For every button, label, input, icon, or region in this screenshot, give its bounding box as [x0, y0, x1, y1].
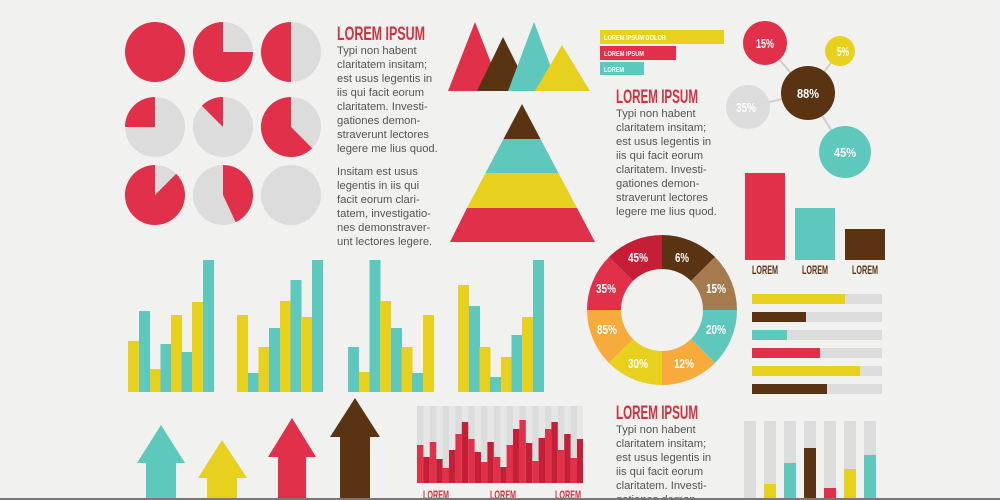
text block 1: legere me lius quod.: [337, 143, 438, 155]
text block 1: Insitam est usus: [337, 166, 418, 178]
text block 3: claritatem. Investi-: [616, 480, 707, 492]
bubble network: 35%: [736, 100, 756, 115]
tag bars legend: [600, 30, 724, 75]
pie chart grid: [125, 22, 321, 225]
text block 3: [616, 403, 711, 500]
donut chart: 35%: [596, 281, 616, 296]
text block 2: [616, 87, 717, 218]
bubble network: 15%: [756, 36, 774, 51]
text block 2: iis qui facit eorum: [616, 150, 703, 162]
text block 1: Typi non habent: [337, 45, 418, 57]
text block 2: legere me lius quod.: [616, 206, 717, 218]
text block 2: Typi non habent: [616, 108, 697, 120]
text block 1: tatem, investigatio-: [337, 208, 431, 220]
text block 1: legentis in iis qui: [337, 180, 419, 192]
text block 3: LOREM IPSUM: [616, 403, 698, 424]
donut chart: 15%: [706, 281, 726, 296]
arrow: brown: [330, 398, 380, 500]
donut chart: 6%: [675, 250, 689, 265]
text block 3: Typi non habent: [616, 424, 697, 436]
text block 2: LOREM IPSUM: [616, 87, 698, 108]
bubble network: 88%: [797, 86, 819, 101]
text block 3: est usus legentis in: [616, 452, 711, 464]
text block 3: iis qui facit eorum: [616, 466, 703, 478]
text block 1: claritatem insitam;: [337, 59, 427, 71]
bar chart group 4: [458, 260, 544, 392]
text block 2: straverunt lectores: [616, 192, 708, 204]
text block 1: nes demonstraver-: [337, 222, 431, 234]
donut chart: 20%: [706, 322, 726, 337]
column chart with labels: LOREM: [852, 263, 878, 277]
donut chart: 85%: [597, 322, 617, 337]
bar chart group 1: [128, 260, 214, 392]
text block 1: est usus legentis in: [337, 73, 432, 85]
horizontal progress bars: [752, 294, 882, 394]
tag bars legend: LOREM IPSUM DOLOR: [604, 35, 666, 42]
text block 1: facit eorum clari-: [337, 194, 420, 206]
layered pyramid: [450, 104, 595, 242]
text block 3: claritatem insitam;: [616, 438, 706, 450]
donut chart: [587, 235, 737, 385]
text block 1: [337, 24, 438, 248]
donut chart: 30%: [628, 356, 648, 371]
bar chart group 2: [237, 260, 323, 392]
bar chart group 3: [348, 260, 434, 392]
bubble network: 45%: [834, 145, 856, 160]
text block 1: LOREM IPSUM: [337, 24, 425, 45]
column chart with labels: LOREM: [802, 263, 828, 277]
column chart with labels: [745, 173, 885, 277]
text block 1: claritatem. Investi-: [337, 101, 428, 113]
tag bars legend: LOREM IPSUM: [604, 51, 644, 58]
text block 2: est usus legentis in: [616, 136, 711, 148]
text block 1: gationes demon-: [337, 115, 421, 127]
donut chart: 12%: [674, 356, 694, 371]
bubble network: [726, 21, 871, 178]
mountain triangles: [448, 22, 590, 91]
text block 2: claritatem. Investi-: [616, 164, 707, 176]
arrow: yellow: [198, 440, 247, 500]
text block 1: unt lectores legere.: [337, 236, 432, 248]
arrow: red: [268, 418, 316, 500]
text block 1: iis qui facit eorum: [337, 87, 424, 99]
text block 1: straverunt lectores: [337, 129, 429, 141]
donut chart: 45%: [628, 250, 648, 265]
column chart with labels: LOREM: [752, 263, 778, 277]
arrow: teal: [137, 425, 185, 500]
vertical progress bars: [744, 421, 876, 500]
tag bars legend: LOREM: [604, 67, 624, 74]
text block 2: claritatem insitam;: [616, 122, 706, 134]
text block 2: gationes demon-: [616, 178, 700, 190]
bubble network: 5%: [837, 44, 849, 59]
red histogram chart: [417, 406, 583, 500]
